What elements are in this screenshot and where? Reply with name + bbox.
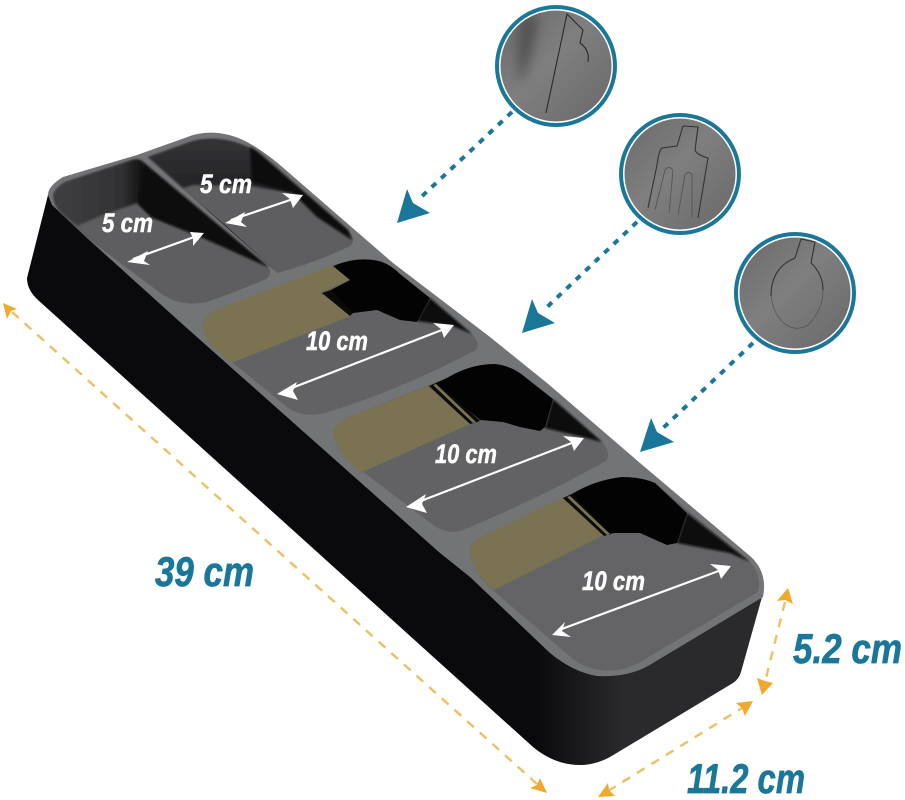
icon: fork detail circle <box>621 115 739 233</box>
orange dashed arrow: width <box>598 701 753 797</box>
label: length: 39 cm <box>155 548 254 595</box>
orange dashed arrow: height <box>757 588 793 695</box>
white arrow: first 10 cm <box>277 323 454 400</box>
blue dashed arrow: spoon slot <box>640 343 753 452</box>
blue dashed arrow: fork slot <box>522 222 637 333</box>
white arrow: right 5 cm <box>225 193 303 227</box>
white arrow: left 5 cm <box>127 232 204 265</box>
compartment: second 10 cm with olive insert <box>333 364 608 532</box>
tray body <box>27 195 762 765</box>
compartment: left 5 cm <box>53 159 270 303</box>
compartment: third 10 cm with olive insert <box>470 477 759 671</box>
orange dashed arrow: length <box>3 303 547 793</box>
label: third 10 cm: 10 cm <box>582 566 645 596</box>
compartment: first 10 cm with olive insert <box>203 259 478 415</box>
compartment: right 5 cm <box>148 139 353 273</box>
icon: knife detail circle <box>497 7 615 125</box>
icon: spoon detail circle <box>736 234 854 352</box>
blue dashed arrow: knife slot <box>397 112 512 223</box>
label: right 5 cm: 5 cm <box>200 169 252 199</box>
label: second 10 cm: 10 cm <box>435 439 497 469</box>
label: left 5 cm: 5 cm <box>102 208 153 238</box>
white arrow: second 10 cm <box>406 436 584 513</box>
white arrow: third 10 cm <box>552 564 731 637</box>
tray rim <box>48 133 764 676</box>
label: first 10 cm: 10 cm <box>306 326 368 356</box>
